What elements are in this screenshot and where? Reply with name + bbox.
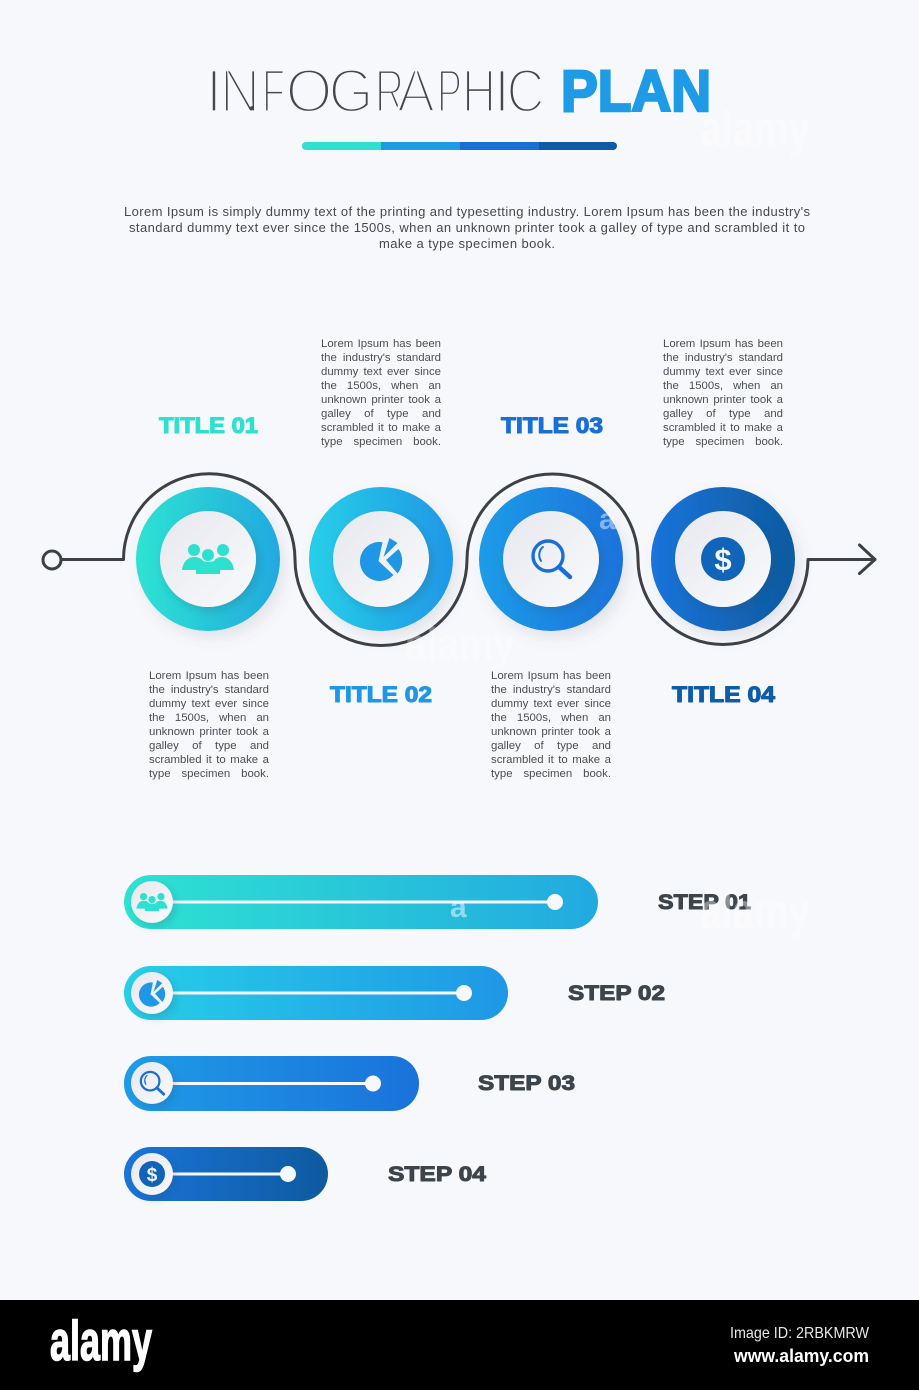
icon: dollar xyxy=(701,537,745,581)
footer band xyxy=(0,1300,919,1390)
description 2: scrambled it to make a xyxy=(321,422,441,434)
icon: dollar small xyxy=(139,1161,165,1187)
watermarks: a xyxy=(450,891,467,924)
icon: pie small xyxy=(139,980,165,1007)
footer image id: Image ID: 2RBKMRW xyxy=(730,1325,870,1342)
footer logo: alamy xyxy=(50,1309,152,1372)
intro text: standard dummy text ever since the 1500s, when an unknown printer took a galley of type and scrambled it to xyxy=(129,220,805,235)
description 2: Lorem Ipsum has been xyxy=(321,338,441,350)
description 2: the industry's standard xyxy=(321,352,441,364)
description 4: Lorem Ipsum has been xyxy=(663,338,783,350)
description 1: scrambled it to make a xyxy=(149,754,269,766)
watermarks: alamy xyxy=(405,618,515,670)
description 2: galley of type and xyxy=(321,408,441,420)
watermarks xyxy=(405,101,810,939)
description 4: scrambled it to make a xyxy=(663,422,783,434)
intro text: Lorem Ipsum is simply dummy text of the printing and typesetting industry. Lorem Ipsum has been the industry's xyxy=(124,204,810,219)
title: H xyxy=(462,57,496,125)
description 4: the 1500s, when an xyxy=(663,380,783,392)
description 2: dummy text ever since xyxy=(321,366,441,378)
description 1: the 1500s, when an xyxy=(149,712,269,724)
title: C xyxy=(506,57,544,125)
step titles: TITLE 04 xyxy=(672,682,776,707)
intro text xyxy=(124,204,810,251)
step titles: TITLE 03 xyxy=(501,413,603,438)
icon: people xyxy=(182,544,234,574)
icon: magnifier xyxy=(533,541,570,577)
description 4: type specimen book. xyxy=(663,436,783,448)
description 1: the industry's standard xyxy=(149,684,269,696)
progress bar 3 xyxy=(124,1056,419,1111)
description 1: dummy text ever since xyxy=(149,698,269,710)
title: O xyxy=(286,57,332,125)
step circle 2 xyxy=(309,487,453,631)
description 3 xyxy=(491,670,611,780)
watermarks: alamy xyxy=(700,883,810,939)
watermarks: a xyxy=(599,503,616,536)
step circle 4 xyxy=(651,487,795,631)
icon: people small xyxy=(136,893,168,911)
description 3: unknown printer took a xyxy=(491,726,611,738)
title underline xyxy=(302,142,617,150)
description 3: Lorem Ipsum has been xyxy=(491,670,611,682)
watermarks: alamy xyxy=(700,101,810,157)
description 3: scrambled it to make a xyxy=(491,754,611,766)
description 1: galley of type and xyxy=(149,740,269,752)
description 2 xyxy=(321,338,441,448)
step labels: STEP 02 xyxy=(568,982,665,1005)
description 3: galley of type and xyxy=(491,740,611,752)
step circle 1 xyxy=(136,487,280,631)
step titles: TITLE 02 xyxy=(330,682,432,707)
title: A xyxy=(397,57,435,125)
title: N xyxy=(220,57,260,125)
step titles: TITLE 01 xyxy=(159,413,258,438)
step labels: STEP 03 xyxy=(478,1072,575,1095)
description 4: galley of type and xyxy=(663,408,783,420)
title: R xyxy=(375,57,404,125)
icon: dollar: $ xyxy=(714,542,732,577)
title xyxy=(206,57,711,125)
progress bar 1 xyxy=(124,875,598,929)
footer url: www.alamy.com xyxy=(733,1346,869,1366)
description 1: type specimen book. xyxy=(149,768,269,780)
title: I xyxy=(206,57,222,125)
progress bar 4 xyxy=(124,1147,328,1201)
description 3: type specimen book. xyxy=(491,768,611,780)
step circle 3 xyxy=(479,487,623,631)
icon: magnifier small xyxy=(141,1072,164,1094)
step titles xyxy=(159,413,776,707)
description 1: unknown printer took a xyxy=(149,726,269,738)
title: I xyxy=(494,57,510,125)
step labels: STEP 04 xyxy=(388,1163,486,1186)
title: P xyxy=(437,57,462,125)
intro text: make a type specimen book. xyxy=(379,236,555,251)
description 2: unknown printer took a xyxy=(321,394,441,406)
description 1 xyxy=(149,670,269,780)
description 1: Lorem Ipsum has been xyxy=(149,670,269,682)
description 2: the 1500s, when an xyxy=(321,380,441,392)
icon: pie chart xyxy=(360,538,402,581)
description 4: dummy text ever since xyxy=(663,366,783,378)
connector line with arrow xyxy=(43,474,875,646)
description 4 xyxy=(663,338,783,448)
progress bar 2 xyxy=(124,966,508,1020)
title: F xyxy=(262,57,285,125)
description 4: unknown printer took a xyxy=(663,394,783,406)
icon: dollar small: $ xyxy=(147,1165,158,1186)
description 3: dummy text ever since xyxy=(491,698,611,710)
title: G xyxy=(328,57,374,125)
description 3: the 1500s, when an xyxy=(491,712,611,724)
description 3: the industry's standard xyxy=(491,684,611,696)
title: PLAN xyxy=(561,59,711,124)
step labels: STEP 01 xyxy=(658,891,751,914)
step labels xyxy=(388,891,751,1186)
description 2: type specimen book. xyxy=(321,436,441,448)
description 4: the industry's standard xyxy=(663,352,783,364)
